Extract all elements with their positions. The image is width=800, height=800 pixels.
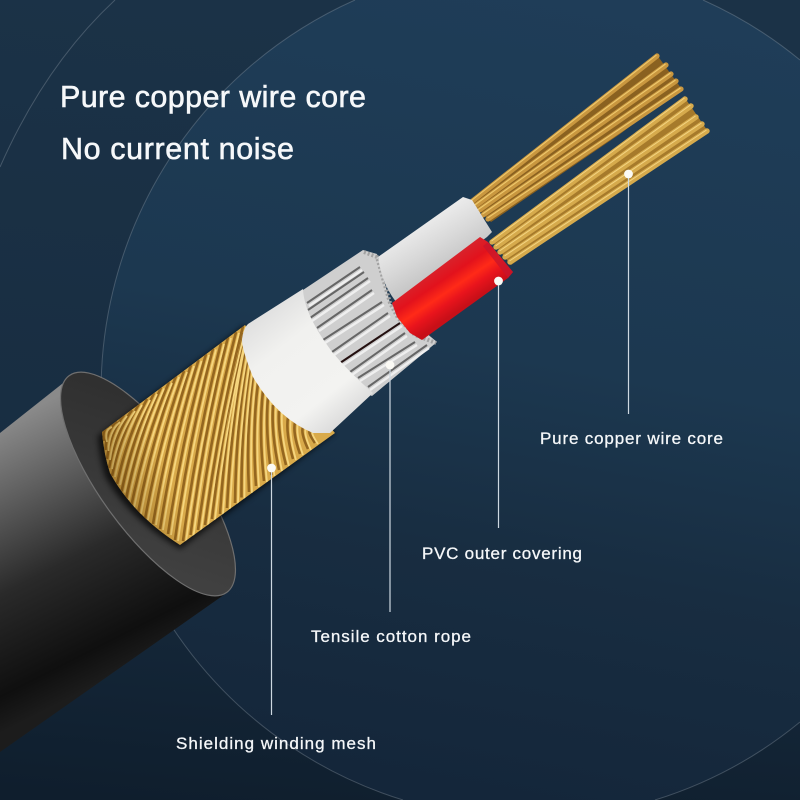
copper strands: upper bundle [470, 55, 681, 222]
heading [60, 80, 366, 166]
white inner tube [378, 197, 492, 303]
callout: tensile cotton rope: Tensile cotton rope [311, 627, 471, 646]
cable illustration [0, 55, 707, 752]
red PVC tube [392, 237, 513, 340]
callout: pure copper wire core: Pure copper wire core [540, 429, 723, 448]
callout: PVC outer covering: PVC outer covering [422, 544, 582, 563]
gold shielding mesh [95, 320, 340, 550]
heading: Pure copper wire core [60, 80, 366, 114]
callout: tensile cotton rope [311, 361, 471, 646]
callout: pure copper wire core [540, 170, 723, 448]
tensile cotton rope [297, 250, 437, 396]
callout: shielding winding mesh: Shielding winding mesh [176, 734, 376, 753]
white sleeve [242, 289, 373, 433]
callout: PVC outer covering [422, 277, 582, 563]
copper strands: lower bundle [492, 98, 707, 265]
heading: No current noise [61, 132, 294, 166]
black outer jacket [0, 325, 335, 752]
callout: shielding winding mesh [176, 464, 376, 753]
